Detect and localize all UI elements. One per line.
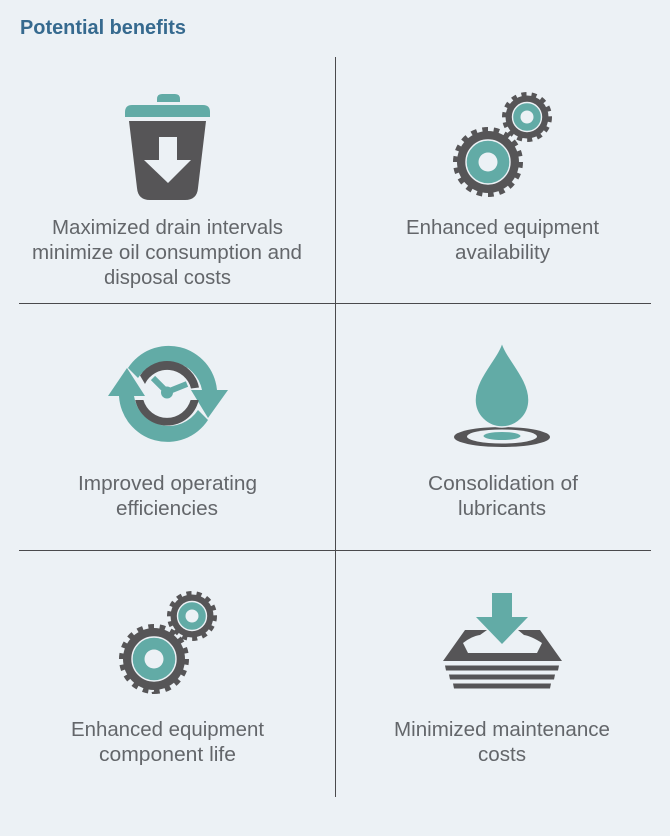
- panel: component life: [71, 593, 264, 766]
- icon: trash bin with down arrow: [125, 94, 210, 200]
- text: operating efficiencies: [78, 473, 257, 520]
- icon: gears: [455, 94, 550, 195]
- text: component life: Enhanced equipment: [71, 719, 264, 741]
- text: maintenance costs: [394, 719, 610, 766]
- text: equipment availability: availability: [455, 242, 550, 264]
- panel: maintenance costs: [394, 593, 610, 766]
- title: Potential benefits: [20, 17, 186, 39]
- icon: clock with cycle arrows: [108, 346, 228, 442]
- text: equipment availability: Enhanced equipment: [406, 217, 599, 239]
- text: component life: component life: [99, 744, 236, 766]
- text: operating efficiencies: efficiencies: [116, 498, 218, 520]
- text: drain intervals: Maximized drain intervals: [52, 217, 283, 239]
- icon: gears: [121, 593, 215, 692]
- panel: equipment availability: [406, 94, 599, 264]
- text: component life: [71, 719, 264, 766]
- text: consolidation: lubricants: [458, 498, 546, 520]
- panel: drain intervals: [32, 94, 302, 289]
- text: drain intervals: [32, 217, 302, 289]
- icon: tray with down arrow: [443, 593, 562, 688]
- text: maintenance costs: Minimized maintenance: [394, 719, 610, 741]
- panel: operating efficiencies: [78, 346, 257, 520]
- text: drain intervals: minimize oil consumption and: [32, 242, 302, 264]
- text: drain intervals: disposal costs: [104, 267, 231, 289]
- text: consolidation: [428, 473, 578, 520]
- panel: consolidation: [428, 342, 578, 520]
- text: equipment availability: [406, 217, 599, 264]
- text: operating efficiencies: Improved operating: [78, 473, 257, 495]
- icon: oil drop: [454, 342, 550, 447]
- text: maintenance costs: costs: [478, 744, 526, 766]
- text: consolidation: Consolidation of: [428, 473, 578, 495]
